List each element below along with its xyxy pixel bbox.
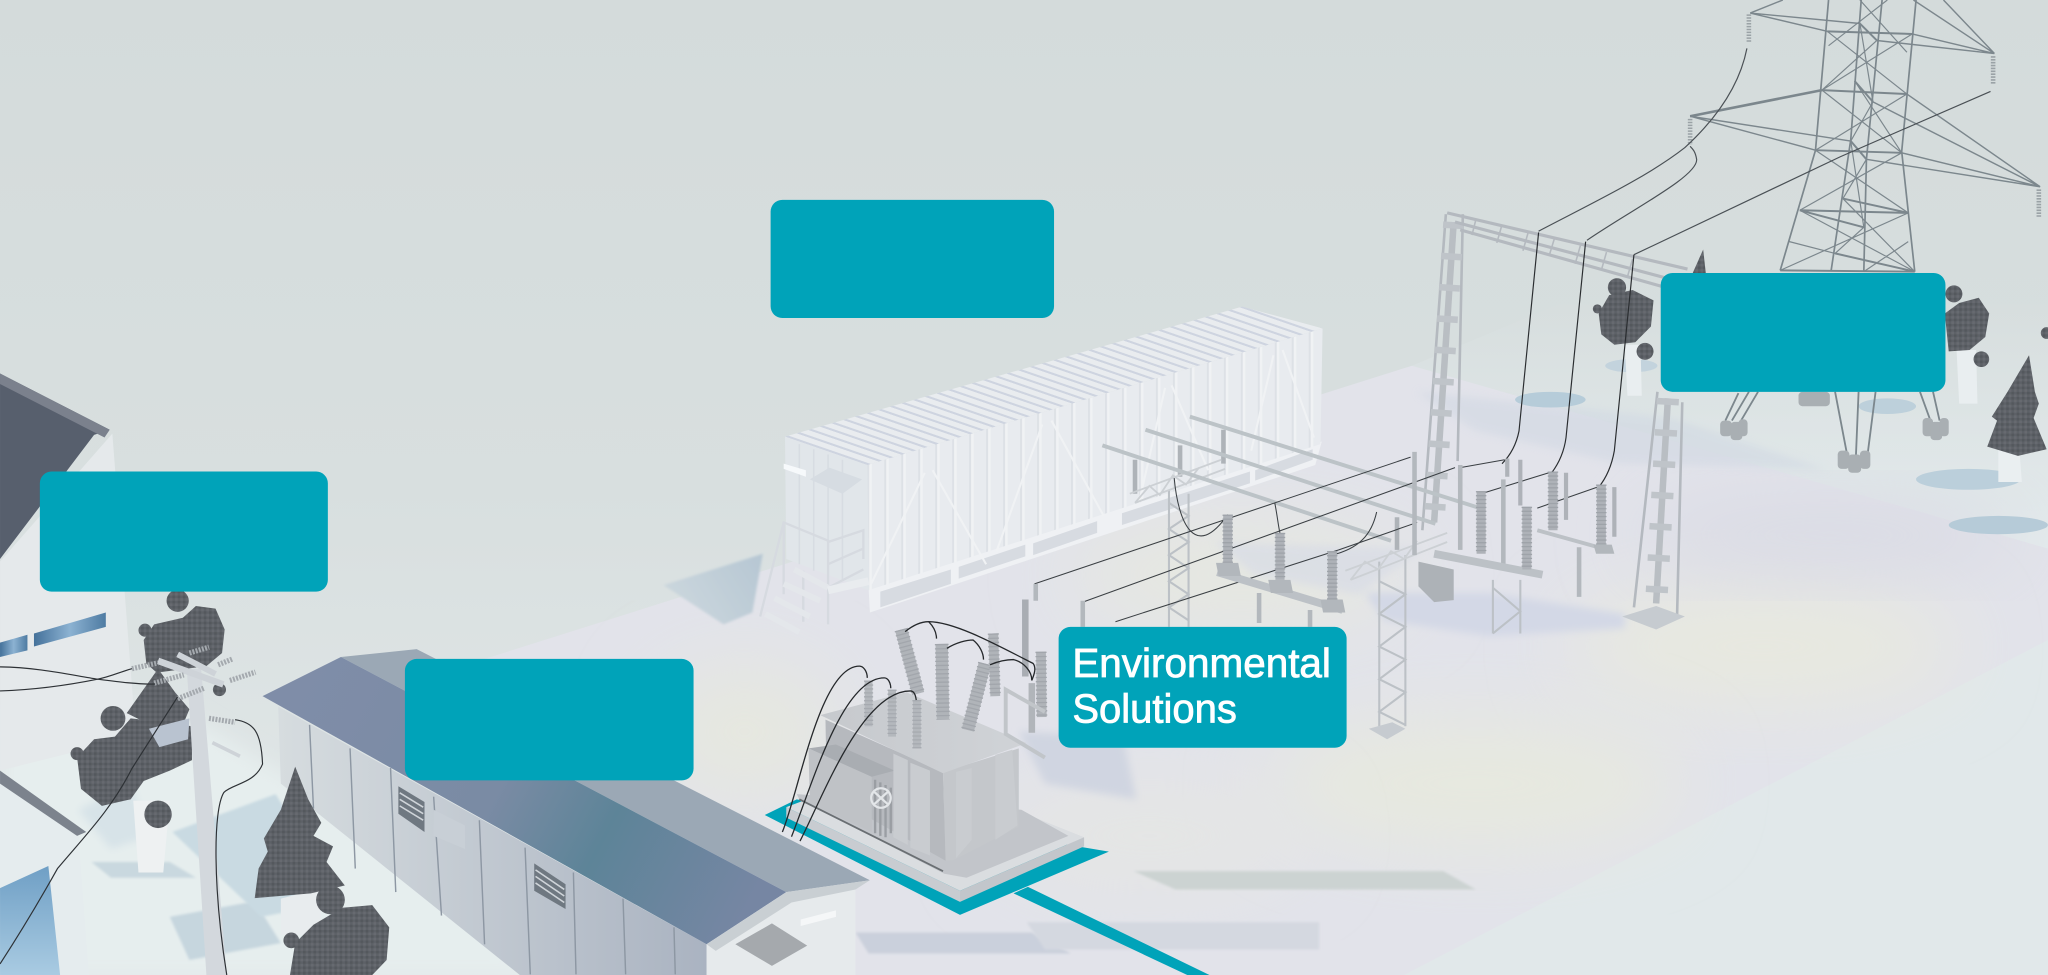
overhead wires <box>1502 48 1991 487</box>
long building <box>263 649 870 975</box>
tree foliage <box>1593 249 1706 360</box>
tank ribs <box>893 750 1017 858</box>
switchgear bay <box>1034 417 1614 739</box>
callout box: bottom left <box>405 659 694 780</box>
container stairs <box>760 522 869 632</box>
pole wires <box>0 667 263 975</box>
gantry frame <box>1422 213 1687 630</box>
callout heading: Solutions <box>1072 685 1237 731</box>
container plinth <box>869 441 1322 613</box>
tower insulators <box>1690 14 2039 218</box>
gantry top beam <box>1447 213 1687 287</box>
ground: substation platform <box>470 366 2048 975</box>
callout box: top <box>771 200 1054 318</box>
long building roof <box>341 649 870 892</box>
building windows <box>0 613 106 657</box>
tree foliage <box>71 590 226 828</box>
trusses <box>1130 460 1447 580</box>
callout heading: Environmental <box>1072 640 1331 686</box>
long building end <box>707 886 856 975</box>
transformer <box>765 599 1209 975</box>
panel lines <box>310 725 675 974</box>
building: lower-left house <box>0 771 89 975</box>
incoming wires <box>1034 457 1597 622</box>
control box <box>1418 562 1454 602</box>
container bracing <box>871 350 1314 584</box>
valve wheel <box>871 788 891 808</box>
container roof <box>785 307 1323 465</box>
ground shadows <box>78 359 2048 960</box>
tank right wall <box>943 748 1019 861</box>
tree trunk right <box>1957 350 1977 404</box>
callout: Environmental Solutions <box>1059 627 1347 748</box>
background trees right <box>1593 249 2048 482</box>
container end <box>785 436 869 590</box>
transmission tower <box>1690 0 2040 473</box>
transformer cables <box>782 622 1035 841</box>
pine lower <box>255 767 345 935</box>
pole cross arms <box>158 654 240 756</box>
tank lid <box>820 692 1027 773</box>
long building wall <box>278 707 707 975</box>
callout box: right <box>1661 273 1945 392</box>
container door light and awning <box>784 464 806 477</box>
insulator feet <box>1216 545 1614 613</box>
gantry left column <box>1422 214 1463 530</box>
pole insulators <box>132 647 255 722</box>
utility pole <box>187 669 227 975</box>
busbar supports <box>1135 430 1397 550</box>
tower footings <box>1720 392 1949 473</box>
tank left wall <box>825 720 946 861</box>
teal pad and pipe <box>765 799 1209 975</box>
vents <box>398 786 566 909</box>
concrete base <box>786 764 1084 891</box>
wall box <box>434 810 465 849</box>
building: dark-roof house <box>0 374 138 771</box>
bushings <box>869 599 1045 758</box>
trees and pole left <box>0 590 389 975</box>
lattice columns <box>1169 490 1520 739</box>
tree foliage lower <box>283 886 389 975</box>
tree trunk <box>1625 345 1642 396</box>
pole transformer <box>149 718 189 747</box>
container side <box>867 328 1323 590</box>
gantry right column <box>1622 392 1685 630</box>
insulator posts <box>1036 452 1579 627</box>
battery container <box>760 307 1323 632</box>
radiator <box>808 748 872 832</box>
tower cross arms <box>1690 0 2040 187</box>
insulators <box>1228 472 1601 599</box>
pine right <box>1987 355 2047 482</box>
insulator beams <box>1217 530 1608 610</box>
tree foliage right <box>1945 285 2048 367</box>
tree trunk <box>133 801 170 872</box>
callout box: left <box>40 472 328 592</box>
container underside pockets <box>880 449 1313 607</box>
busbars <box>1102 417 1480 541</box>
tower legs <box>1725 392 1940 455</box>
tower body <box>1780 0 1916 272</box>
ground: surrounding white terrain <box>0 300 2048 975</box>
